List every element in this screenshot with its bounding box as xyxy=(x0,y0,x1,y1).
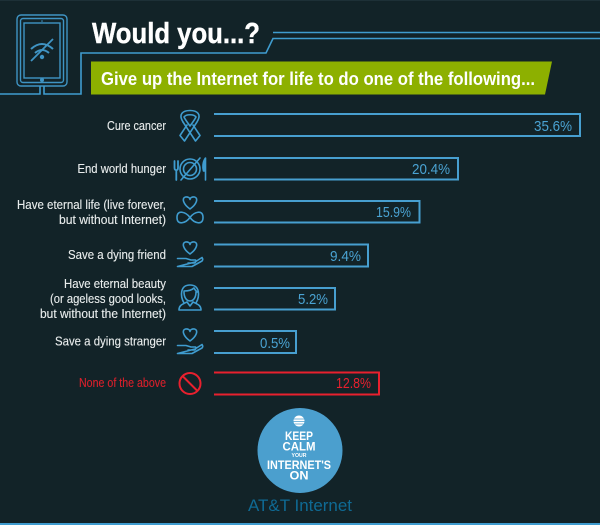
row: eternal beauty: Have eternal beauty xyxy=(64,277,167,291)
banner: Give up the Internet for life to do one of the following... xyxy=(101,68,535,89)
row: none of the above xyxy=(79,373,200,394)
badge: keep calm: YOUR xyxy=(292,453,307,459)
row: eternal beauty: (or ageless good looks, xyxy=(50,292,166,306)
row: eternal life: Have eternal life (live forever, xyxy=(17,198,166,212)
icon: heart and infinity xyxy=(177,197,203,223)
bar: 0.5%: 0.5% xyxy=(260,335,290,352)
row: cure cancer xyxy=(107,110,200,141)
icon: plate with fork and knife xyxy=(174,158,206,180)
badge: keep calm: INTERNET'S xyxy=(267,458,331,472)
bar: 20.4% xyxy=(214,158,458,180)
badge: keep calm: KEEP xyxy=(285,429,313,443)
icon: ribbon xyxy=(180,110,200,141)
row: eternal beauty: but without the Internet) xyxy=(40,307,166,321)
brand name: AT&T Internet xyxy=(248,496,352,515)
bar: 9.4%: 9.4% xyxy=(330,248,361,265)
bar: 5.2% xyxy=(214,288,335,310)
bar: 15.9%: 15.9% xyxy=(376,204,411,221)
row: save a dying friend xyxy=(68,242,203,266)
bar: 12.8% xyxy=(214,372,379,394)
row: none of the above: None of the above xyxy=(79,376,166,390)
icon: prohibition sign xyxy=(180,373,200,394)
row: eternal beauty xyxy=(40,277,201,321)
icon: AT&T globe xyxy=(294,416,304,426)
bar: 0.5% xyxy=(214,331,296,353)
row: save a dying friend: Save a dying friend xyxy=(68,248,166,262)
row: eternal life xyxy=(17,197,203,227)
row: end world hunger: End world hunger xyxy=(78,162,166,176)
bar: 9.4% xyxy=(214,244,368,266)
icon: woman portrait xyxy=(179,285,201,310)
row: save a dying stranger xyxy=(55,329,203,354)
badge: keep calm: ON xyxy=(290,468,308,482)
icon: tablet with crossed-out wifi xyxy=(17,15,67,86)
bar: 15.9% xyxy=(214,201,420,222)
bar: 35.6%: 35.6% xyxy=(534,118,572,135)
bar: 12.8%: 12.8% xyxy=(336,375,371,392)
row: end world hunger xyxy=(78,158,206,180)
badge: keep calm: CALM xyxy=(282,440,316,454)
row: cure cancer: Cure cancer xyxy=(107,119,166,133)
badge: keep calm xyxy=(258,408,342,493)
banner xyxy=(91,62,552,94)
icon: hand holding heart xyxy=(178,329,203,354)
icon: hand holding heart xyxy=(178,242,203,266)
header connector lines xyxy=(0,32,600,94)
bar: 20.4%: 20.4% xyxy=(412,161,450,178)
bar: 5.2%: 5.2% xyxy=(298,291,328,308)
bar: 35.6% xyxy=(214,114,580,136)
row: eternal life: but without Internet) xyxy=(59,213,166,227)
row: save a dying stranger: Save a dying stranger xyxy=(55,334,166,348)
title: Would you...? xyxy=(92,18,260,50)
